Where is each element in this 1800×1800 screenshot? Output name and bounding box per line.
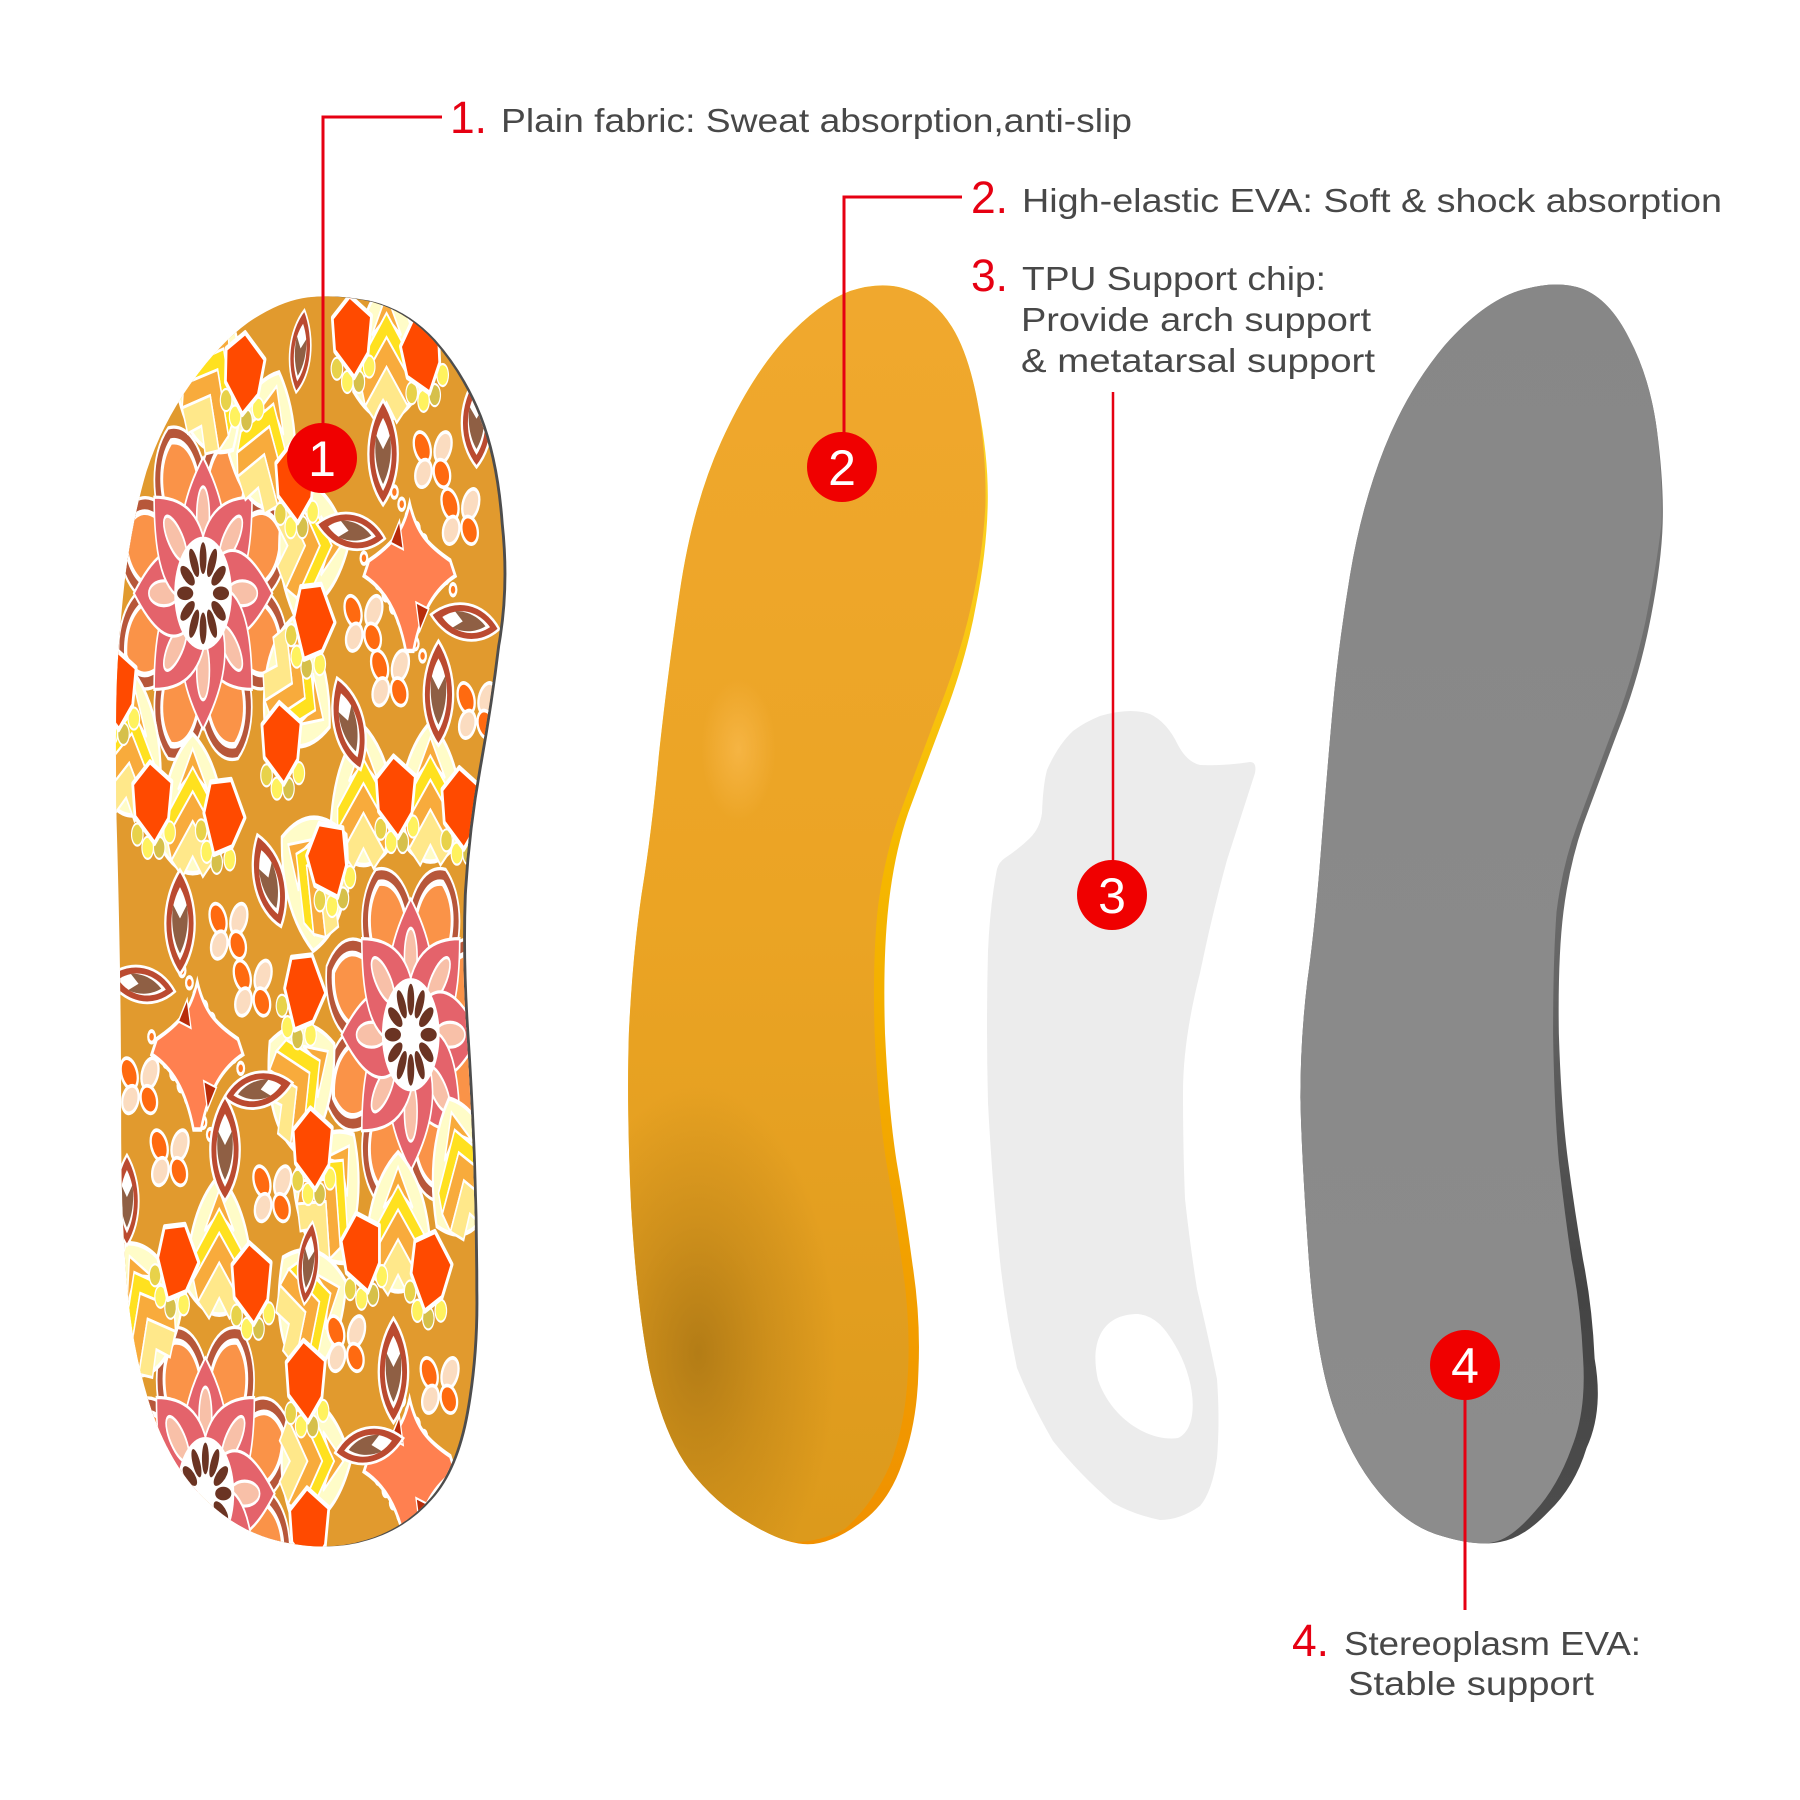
label 1 — [450, 92, 1132, 143]
insole layer 3: TPU support chip — [987, 711, 1255, 1520]
label 2: High-elastic EVA: Soft & shock absorption — [1022, 182, 1722, 219]
insole layer 4: stereoplasm EVA — [1300, 284, 1663, 1543]
label 3: TPU Support chip: — [1022, 260, 1326, 297]
label 4 — [1292, 1615, 1641, 1702]
marker 1 — [287, 423, 357, 493]
label 1: Plain fabric: Sweat absorption,anti-slip — [501, 102, 1132, 139]
insole layer 1: patterned plain fabric — [116, 296, 506, 1546]
marker 2 — [807, 432, 877, 502]
marker 2: 2 — [828, 440, 856, 496]
callout 2: high-elastic EVA — [807, 172, 1722, 502]
marker 3 — [1077, 860, 1147, 930]
callout 4: stereoplasm EVA — [1292, 1330, 1641, 1702]
label 4: Stereoplasm EVA: — [1344, 1625, 1641, 1662]
insole layer 2: high-elastic EVA — [628, 285, 988, 1544]
marker 4 — [1430, 1330, 1500, 1400]
label 4: Stable support — [1348, 1665, 1594, 1702]
label 3 — [971, 250, 1375, 379]
marker 1: 1 — [308, 431, 336, 487]
label 3: Provide arch support — [1021, 301, 1371, 338]
label 1: 1. — [450, 92, 487, 143]
marker 4: 4 — [1451, 1338, 1479, 1394]
label 3: & metatarsal support — [1021, 342, 1375, 379]
label 2: 2. — [971, 172, 1008, 223]
callout 3: TPU support chip — [971, 250, 1375, 930]
callout 1: plain fabric — [287, 92, 1132, 493]
label 4: 4. — [1292, 1615, 1329, 1666]
marker 3: 3 — [1098, 868, 1126, 924]
label 2 — [971, 172, 1722, 223]
label 3: 3. — [971, 250, 1008, 301]
